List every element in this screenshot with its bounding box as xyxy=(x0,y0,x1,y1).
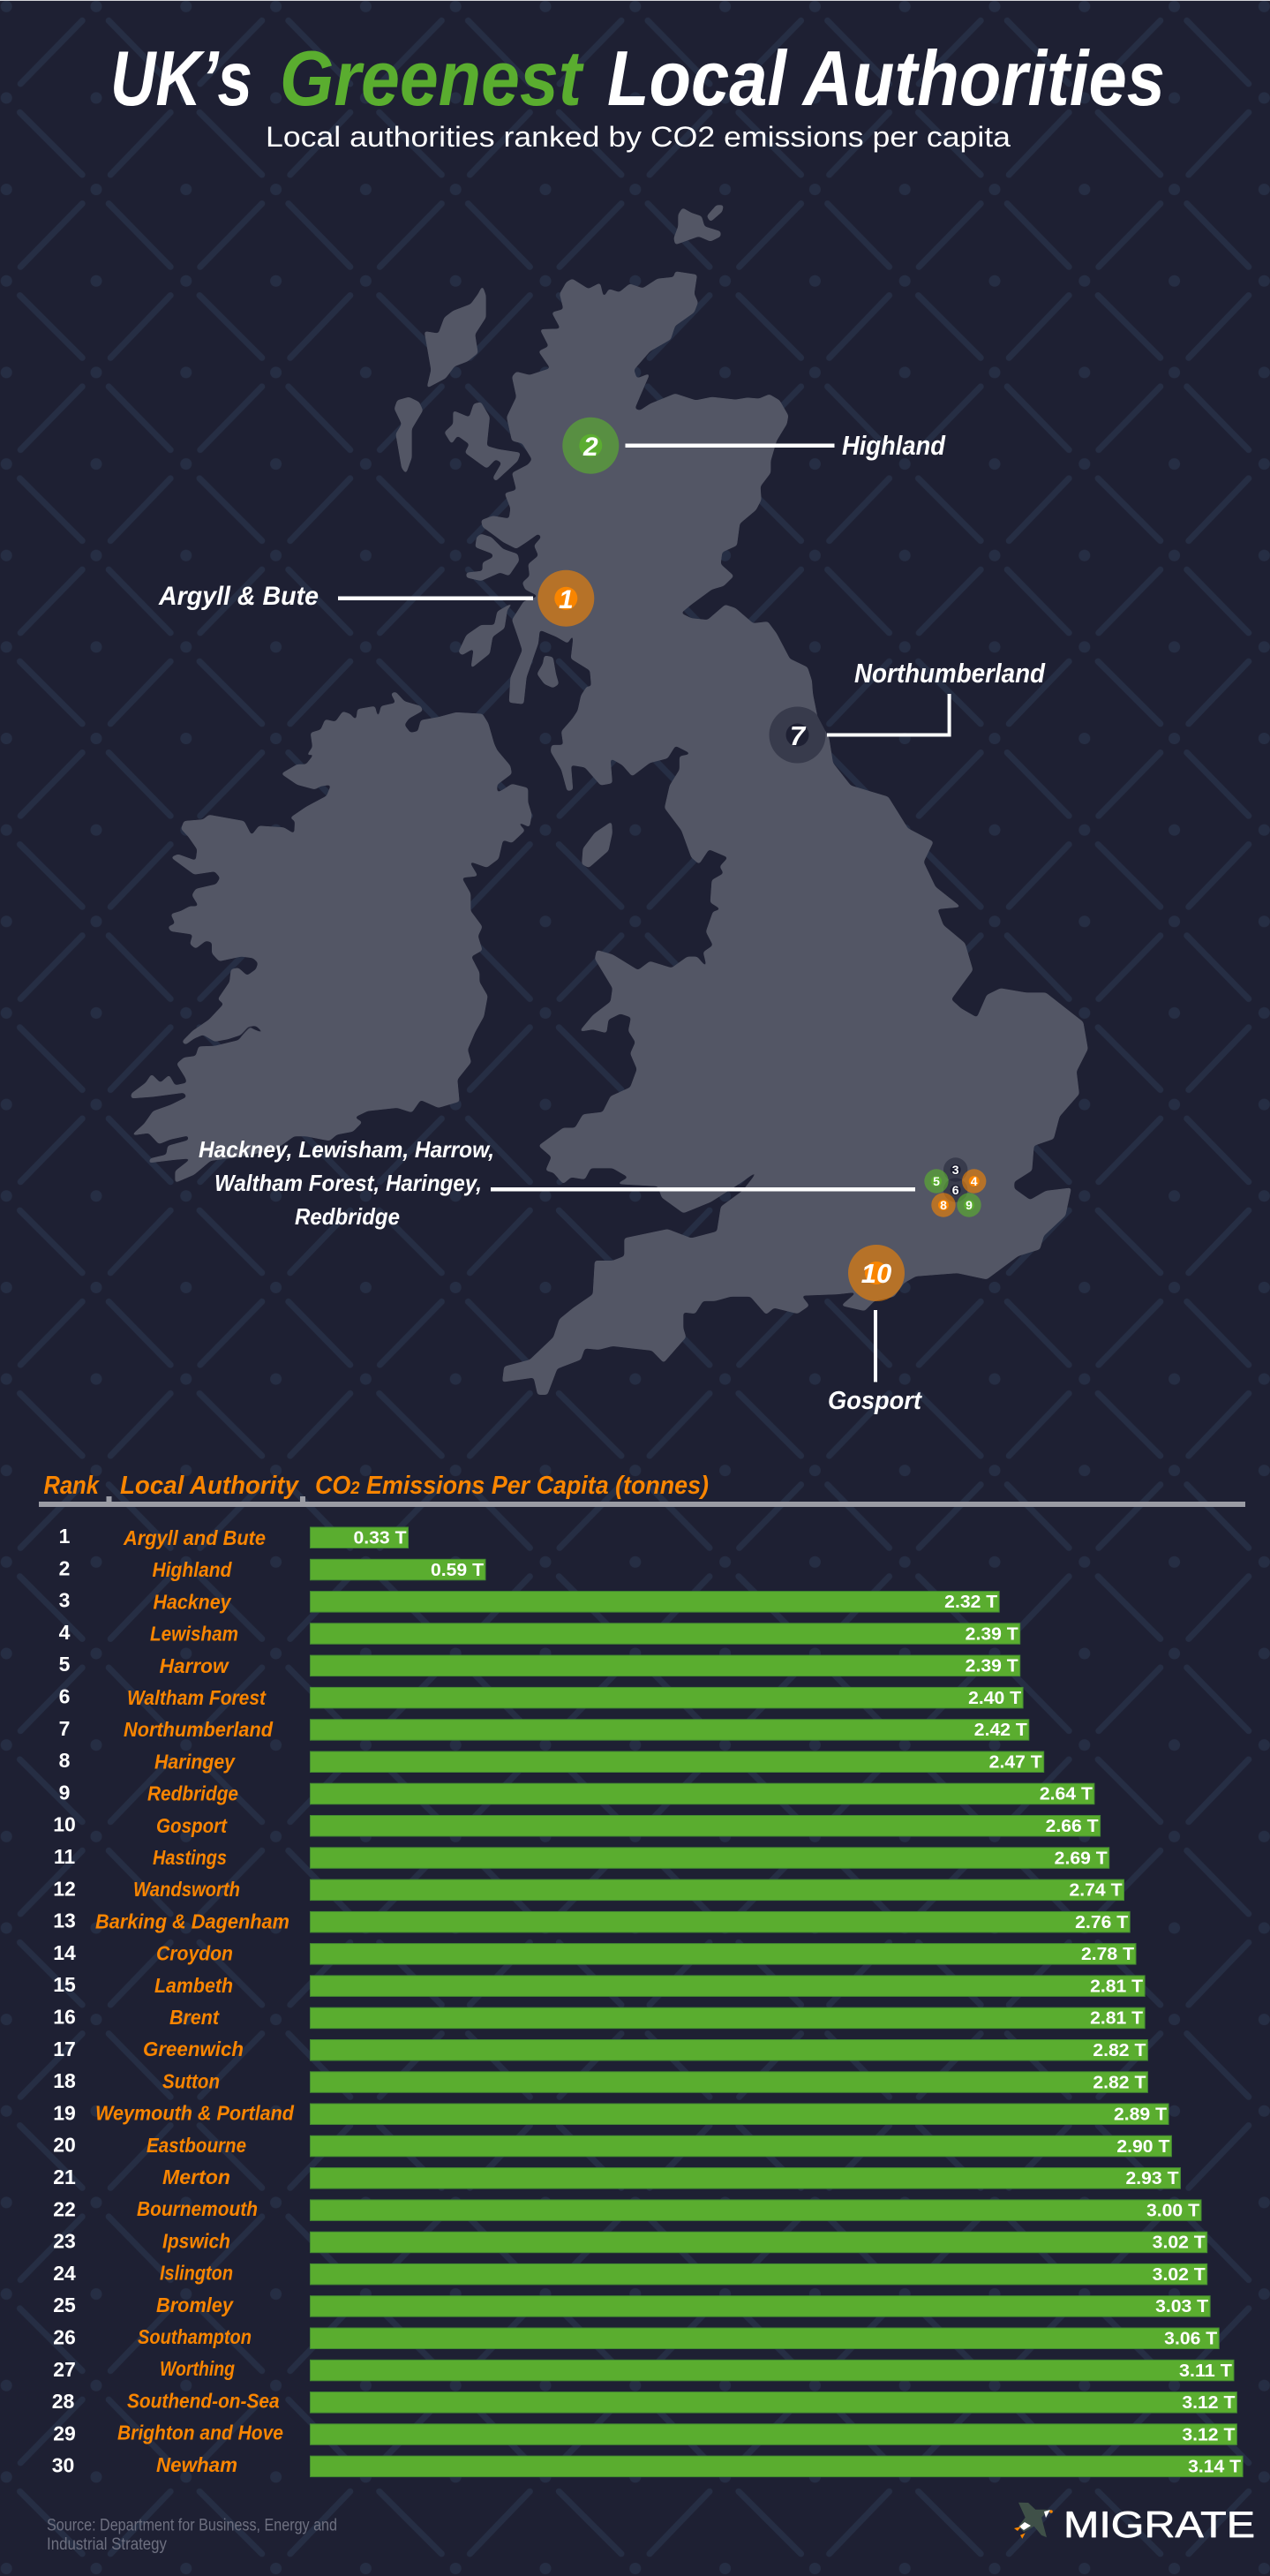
row 3: 3 xyxy=(59,1589,70,1612)
row 2 xyxy=(59,1556,485,1581)
row 27: 3.11 T xyxy=(1179,2361,1232,2381)
row 28 xyxy=(52,2389,1236,2413)
row 16 xyxy=(53,2006,1145,2029)
label: London boroughs: Hackney, Lewisham, Harrow, xyxy=(199,1136,494,1163)
row 20: Eastbourne xyxy=(147,2134,246,2157)
callout line: Highland xyxy=(625,443,835,448)
row 5: 2.39 T xyxy=(966,1657,1018,1676)
row 24: 24 xyxy=(53,2262,76,2285)
row 29 xyxy=(53,2422,1236,2444)
row 13: 13 xyxy=(53,1909,76,1932)
row 12: 2.74 T xyxy=(1070,1881,1123,1901)
marker cluster: London boroughs 3 4 5 6 8 9: 8 xyxy=(940,1198,947,1212)
marker cluster: London boroughs 3 4 5 6 8 9 xyxy=(924,1157,986,1217)
row 18: 2.82 T xyxy=(1093,2073,1146,2092)
row 9: Redbridge xyxy=(147,1782,238,1805)
logo: Migrate: MIGRATE xyxy=(1063,2504,1255,2545)
row 12: 12 xyxy=(53,1877,76,1900)
row 13: 2.76 T xyxy=(1075,1913,1128,1932)
label: Northumberland: Northumberland xyxy=(854,658,1046,689)
row 23: 23 xyxy=(53,2230,76,2253)
row 2: 2 xyxy=(59,1556,70,1579)
row 19: 2.89 T xyxy=(1114,2105,1167,2124)
row 5: 5 xyxy=(59,1653,71,1676)
row 11: Hastings xyxy=(153,1846,227,1869)
row 6 xyxy=(59,1684,1023,1709)
row 3: Hackney xyxy=(154,1590,232,1613)
row 3 xyxy=(59,1589,999,1613)
title xyxy=(110,34,1165,122)
row 5 xyxy=(59,1653,1020,1677)
row 4: 4 xyxy=(59,1621,71,1644)
row 8: 8 xyxy=(59,1749,71,1772)
row 22 xyxy=(53,2197,1201,2220)
row 12: Wandsworth xyxy=(133,1878,240,1901)
label: London boroughs: Waltham Forest, Haringey, xyxy=(214,1170,482,1196)
row 30: 3.14 T xyxy=(1188,2458,1241,2477)
row 5: Harrow xyxy=(160,1654,230,1677)
marker: 7 Northumberland xyxy=(770,706,826,763)
row 11 xyxy=(54,1845,1109,1869)
row 6: 6 xyxy=(59,1684,70,1707)
row 8: Haringey xyxy=(154,1750,236,1773)
row 25: 3.03 T xyxy=(1155,2297,1208,2316)
row 20: 20 xyxy=(53,2134,76,2157)
row 11: 2.69 T xyxy=(1055,1849,1108,1868)
marker cluster: London boroughs 3 4 5 6 8 9: 9 xyxy=(966,1198,973,1212)
row 10: Gosport xyxy=(156,1814,228,1837)
row 15 xyxy=(53,1973,1145,1997)
row 24 xyxy=(53,2262,1207,2285)
row 9 xyxy=(59,1781,1094,1805)
row 1: Argyll and Bute xyxy=(123,1526,266,1549)
row 15: 15 xyxy=(53,1973,76,1996)
row 1: 1 xyxy=(59,1525,71,1548)
table header: Local Authority xyxy=(120,1472,300,1500)
row 24: 3.02 T xyxy=(1153,2265,1206,2285)
callout line: London boroughs xyxy=(491,1187,915,1192)
row 3: 2.32 T xyxy=(944,1593,997,1612)
logo: Migrate xyxy=(1014,2503,1255,2545)
source note xyxy=(47,2517,337,2554)
map of UK and Ireland xyxy=(131,205,1088,1395)
row 4: 2.39 T xyxy=(966,1624,1018,1644)
table header xyxy=(39,1472,1245,1507)
row 20: 2.90 T xyxy=(1116,2137,1169,2157)
row 17 xyxy=(53,2037,1147,2060)
row 18 xyxy=(53,2069,1147,2092)
row 22: 3.00 T xyxy=(1146,2201,1199,2220)
marker cluster: London boroughs 3 4 5 6 8 9: 6 xyxy=(952,1183,959,1197)
row 6: 2.40 T xyxy=(968,1689,1021,1708)
row 23: 3.02 T xyxy=(1153,2233,1206,2253)
row 11: 11 xyxy=(54,1845,75,1868)
marker cluster: London boroughs 3 4 5 6 8 9: 3 xyxy=(952,1163,959,1177)
label: Argyll and Bute: Argyll & Bute xyxy=(158,582,319,611)
table header: Rank xyxy=(44,1472,101,1500)
row 20 xyxy=(53,2134,1171,2157)
marker: 2 Highland: 2 xyxy=(582,433,598,462)
row 1: 0.33 T xyxy=(353,1529,406,1548)
row 7 xyxy=(59,1717,1029,1741)
row 14: Croydon xyxy=(156,1942,233,1965)
row 7: Northumberland xyxy=(124,1718,274,1741)
row 7: 2.42 T xyxy=(974,1721,1027,1740)
row 10 xyxy=(53,1813,1101,1837)
row 16: Brent xyxy=(169,2006,220,2029)
row 8 xyxy=(59,1749,1044,1773)
row 12 xyxy=(53,1877,1124,1901)
row 26 xyxy=(53,2325,1219,2348)
row 23 xyxy=(53,2229,1207,2253)
marker: 2 Highland xyxy=(562,418,619,474)
marker cluster: London boroughs 3 4 5 6 8 9: 4 xyxy=(971,1174,978,1188)
row 26: Southampton xyxy=(138,2325,252,2348)
row 8: 2.47 T xyxy=(989,1753,1042,1773)
row 19 xyxy=(53,2101,1169,2125)
row 27: 27 xyxy=(53,2358,76,2381)
row 28: Southend-on-Sea xyxy=(127,2389,280,2412)
row 24: Islington xyxy=(160,2262,233,2285)
row 25: Bromley xyxy=(156,2294,234,2316)
row 25 xyxy=(53,2294,1210,2316)
row 25: 25 xyxy=(53,2294,76,2316)
marker: 10 Gosport: 10 xyxy=(861,1258,891,1289)
callout line: Northumberland xyxy=(827,694,950,734)
row 15: 2.81 T xyxy=(1090,1977,1143,1996)
row 17: 2.82 T xyxy=(1093,2041,1146,2060)
row 27 xyxy=(53,2357,1234,2381)
row 16: 16 xyxy=(53,2006,76,2029)
marker cluster: London boroughs 3 4 5 6 8 9: 5 xyxy=(933,1174,940,1188)
subtitle: Local authorities ranked by CO2 emissions per capita xyxy=(266,121,1011,153)
row 17: Greenwich xyxy=(143,2037,244,2060)
row 7: 7 xyxy=(59,1717,70,1740)
row 27: Worthing xyxy=(160,2357,235,2380)
row 4 xyxy=(59,1621,1020,1646)
row 18: 18 xyxy=(53,2069,76,2092)
source note: Industrial Strategy xyxy=(47,2535,167,2554)
row 21: 2.93 T xyxy=(1126,2169,1179,2188)
row 6: Waltham Forest xyxy=(127,1686,267,1709)
row 30: 30 xyxy=(52,2454,74,2477)
row 15: Lambeth xyxy=(154,1974,233,1997)
row 22: Bournemouth xyxy=(137,2197,258,2220)
row 2: 0.59 T xyxy=(431,1561,484,1580)
row 10: 10 xyxy=(53,1813,76,1836)
ranking bar chart xyxy=(52,1525,1243,2477)
source note: Source: Department for Business, Energy and xyxy=(47,2517,337,2535)
marker: 1 Argyll and Bute: 1 xyxy=(559,585,574,614)
row 13 xyxy=(53,1909,1130,1932)
icon: bird xyxy=(1014,2503,1053,2539)
row 14: 2.78 T xyxy=(1081,1945,1134,1964)
row 19: Weymouth & Portland xyxy=(95,2102,295,2125)
row 19: 19 xyxy=(53,2101,76,2124)
label: Highland: Highland xyxy=(842,430,946,461)
label: Gosport: Gosport xyxy=(828,1387,922,1415)
marker: 10 Gosport xyxy=(848,1245,905,1301)
label: London boroughs: Redbridge xyxy=(295,1203,400,1230)
row 21: 21 xyxy=(53,2165,76,2188)
table header: CO2 Emissions Per Capita (tonnes) xyxy=(315,1472,709,1500)
row 9: 9 xyxy=(59,1781,70,1804)
marker: 7 Northumberland: 7 xyxy=(790,720,807,751)
row 14: 14 xyxy=(53,1941,76,1964)
row 28: 3.12 T xyxy=(1182,2393,1235,2413)
title: Greenest xyxy=(280,34,584,122)
row 30 xyxy=(52,2453,1243,2477)
row 22: 22 xyxy=(53,2197,76,2220)
row 28: 28 xyxy=(52,2390,74,2413)
row 29: Brighton and Hove xyxy=(117,2422,283,2444)
row 10: 2.66 T xyxy=(1046,1817,1099,1836)
row 26: 26 xyxy=(53,2325,76,2348)
row 21 xyxy=(53,2165,1181,2188)
row 21: Merton xyxy=(162,2165,230,2188)
title: Local Authorities xyxy=(607,34,1165,122)
row 30: Newham xyxy=(156,2453,237,2476)
label: London boroughs xyxy=(199,1136,494,1230)
title: UK’s xyxy=(110,34,252,122)
row 9: 2.64 T xyxy=(1040,1785,1093,1804)
row 17: 17 xyxy=(53,2037,76,2060)
row 14 xyxy=(53,1941,1136,1965)
row 29: 29 xyxy=(53,2422,76,2444)
row 29: 3.12 T xyxy=(1182,2425,1235,2444)
callout line: Argyll and Bute xyxy=(338,597,533,600)
row 16: 2.81 T xyxy=(1090,2009,1143,2029)
callout line: Gosport xyxy=(874,1310,877,1382)
row 23: Ipswich xyxy=(162,2229,230,2252)
row 26: 3.06 T xyxy=(1164,2329,1217,2348)
row 2: Highland xyxy=(152,1558,232,1581)
row 4: Lewisham xyxy=(150,1623,238,1646)
row 1 xyxy=(59,1525,408,1549)
row 18: Sutton xyxy=(162,2069,220,2092)
row 13: Barking & Dagenham xyxy=(95,1909,289,1932)
marker: 1 Argyll and Bute xyxy=(537,570,594,627)
